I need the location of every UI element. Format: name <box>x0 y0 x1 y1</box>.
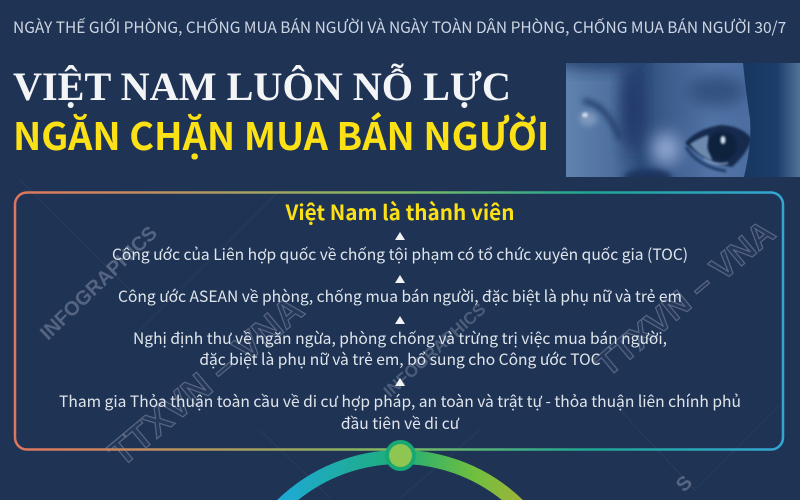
item 1: Công ước của Liên hợp quốc về chống tội phạm có tổ chức xuyên quốc gia (TOC) <box>112 243 688 265</box>
arrow 2 <box>395 275 405 283</box>
watermarks: TTXVN – VNA <box>589 213 782 384</box>
watermarks: INFOGRAPHICS <box>380 300 490 401</box>
watermarks: TTXVN – VNA <box>101 288 311 474</box>
item 2: Công ước ASEAN về phòng, chống mua bán người, đặc biệt là phụ nữ và trẻ em <box>118 285 682 307</box>
item 4 <box>59 390 741 434</box>
title line 2: NGĂN CHẶN MUA BÁN NGƯỜI <box>13 106 549 161</box>
watermarks: INFOGRAPHICS <box>36 222 162 345</box>
arrow 3 <box>395 316 405 324</box>
top line: NGÀY THẾ GIỚI PHÒNG, CHỐNG MUA BÁN NGƯỜI VÀ NGÀY TOÀN DÂN PHÒNG, CHỐNG MUA BÁN NGƯỜI 30/7 <box>13 16 786 38</box>
item 3: đặc biệt là phụ nữ và trẻ em, bổ sung cho Công ước TOC <box>199 348 601 370</box>
item 4: đầu tiên về di cư <box>341 412 459 434</box>
arrow 1 <box>395 232 405 240</box>
item 3 <box>133 327 667 370</box>
panel heading: Việt Nam là thành viên <box>286 196 514 226</box>
photo: eyes <box>566 63 800 177</box>
watermarks: S <box>672 472 697 497</box>
title line 1: VIỆT NAM LUÔN NỖ LỰC <box>13 64 511 109</box>
item 4: Tham gia Thỏa thuận toàn cầu về di cư hợp pháp, an toàn và trật tự - thỏa thuận liên chính phủ <box>59 390 741 412</box>
item 3: Nghị định thư về ngăn ngừa, phòng chống và trừng trị việc mua bán người, <box>133 327 667 349</box>
arrow 4 <box>395 378 405 386</box>
